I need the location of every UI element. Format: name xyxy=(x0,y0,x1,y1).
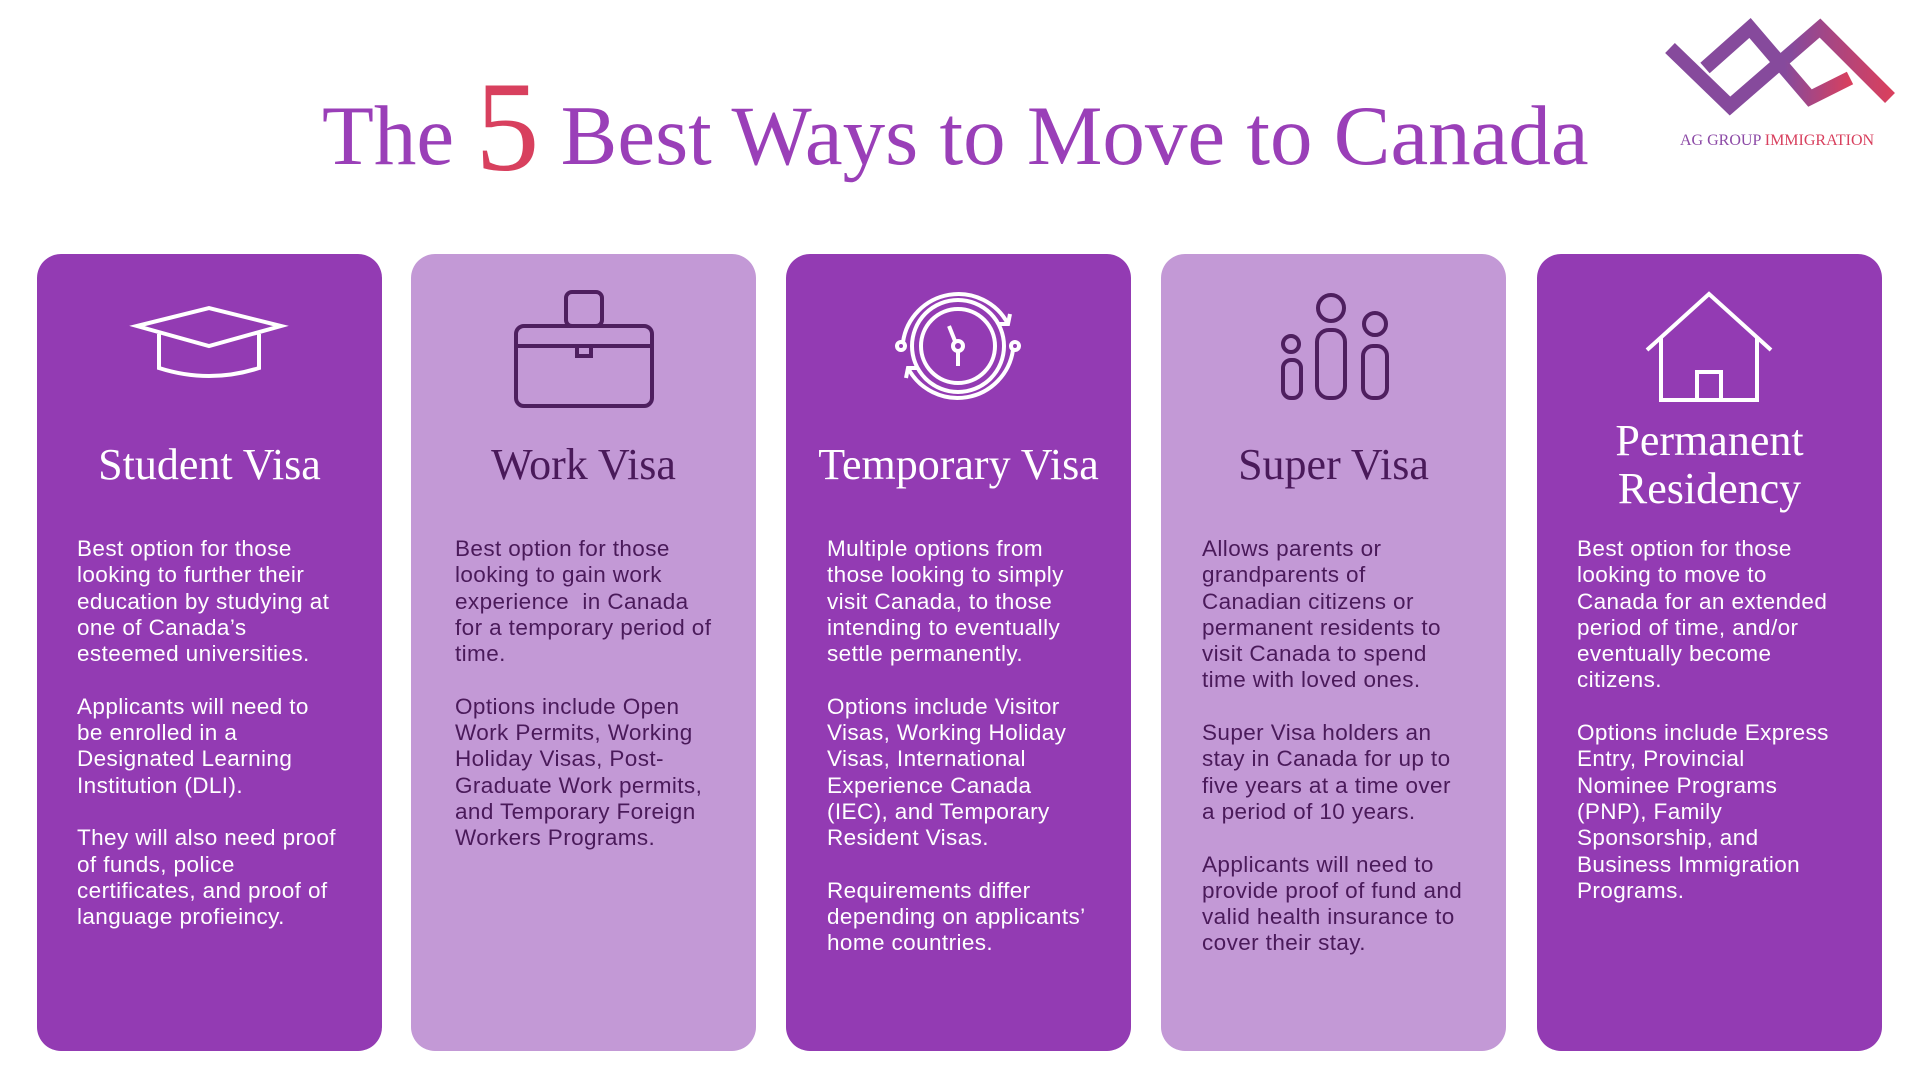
panel: permanent residency xyxy=(1537,254,1882,1051)
title: The 5 Best Ways to Move to Canada xyxy=(322,56,1589,198)
panel: temporary visa xyxy=(786,254,1131,1051)
heading: Temporary Visa xyxy=(818,440,1099,489)
heading: Work Visa xyxy=(491,440,676,489)
logo: AG GROUP IMMIGRATION xyxy=(1680,132,1874,149)
panel: work visa xyxy=(411,254,756,1051)
text block: Multiple options from those looking to simply visit Canada, to those intending to eventually settle permanently. xyxy=(827,536,1064,666)
icon: house xyxy=(1646,291,1772,402)
text block: Best option for those looking to move to Canada for an extended period of time, and/or eventually become citizens. xyxy=(1577,536,1827,692)
icon: clock xyxy=(895,292,1021,400)
text block: Applicants will need to be enrolled in a Designated Learning Institution (DLI). xyxy=(77,694,309,798)
icon: family xyxy=(1281,293,1389,400)
heading xyxy=(1615,416,1804,513)
icon: briefcase xyxy=(514,290,654,408)
logo xyxy=(1665,18,1895,149)
text block: Options include Visitor Visas, Working Holiday Visas, International Experience Canada (IEC), and Temporary Resident Visas. xyxy=(827,694,1066,850)
heading: Permanent xyxy=(1615,416,1804,465)
text block: Super Visa holders an stay in Canada for up to five years at a time over a period of 10 years. xyxy=(1202,720,1451,824)
text block xyxy=(1577,536,1829,903)
heading: Residency xyxy=(1618,464,1801,513)
text block: Applicants will need to provide proof of fund and valid health insurance to cover their stay. xyxy=(1202,852,1462,955)
text block: Best option for those looking to gain work experience in Canada for a temporary period of time. xyxy=(455,536,711,666)
text block xyxy=(827,536,1085,955)
panel: student visa xyxy=(37,254,382,1051)
heading: Student Visa xyxy=(98,440,321,489)
text block: They will also need proof of funds, police certificates, and proof of language profieincy. xyxy=(77,825,336,929)
text block: Allows parents or grandparents of Canadian citizens or permanent residents to visit Canada to spend time with loved ones. xyxy=(1202,536,1441,692)
text block: Best option for those looking to further their education by studying at one of Canada’s esteemed universities. xyxy=(77,536,329,666)
text block xyxy=(455,536,712,850)
panel: super visa xyxy=(1161,254,1506,1051)
text block xyxy=(77,536,336,929)
text block: Requirements differ depending on applicants’ home countries. xyxy=(827,878,1085,955)
text block: Options include Open Work Permits, Working Holiday Visas, Post-Graduate Work permits, and Temporary Foreign Workers Programs. xyxy=(455,694,702,850)
icon: graduation cap xyxy=(129,306,289,378)
text block xyxy=(1202,536,1462,955)
heading: Super Visa xyxy=(1238,440,1429,489)
text block: Options include Express Entry, Provincial Nominee Programs (PNP), Family Sponsorship, and Business Immigration Programs. xyxy=(1577,720,1829,903)
